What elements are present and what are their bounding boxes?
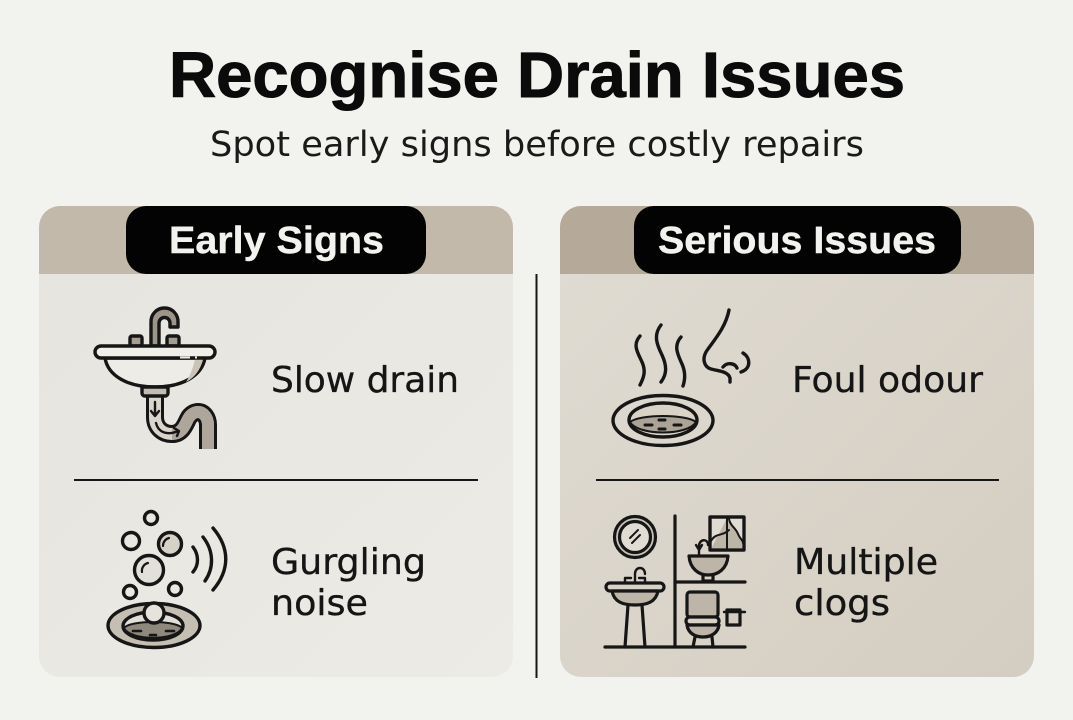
heading pill: early signs bbox=[126, 206, 426, 274]
label: foul odour: Foul odour bbox=[792, 360, 983, 401]
title: Recognise Drain Issues bbox=[169, 39, 905, 111]
subtitle: Spot early signs before costly repairs bbox=[210, 125, 864, 165]
heading pill: early signs: Early Signs bbox=[169, 220, 384, 262]
icon: bubbles and gurgling drain bbox=[108, 512, 226, 648]
label: multiple clogs bbox=[794, 542, 938, 624]
label: gurgling noise: Gurgling bbox=[271, 542, 426, 583]
label: gurgling noise bbox=[271, 542, 426, 624]
icon: bathroom with multiple fixtures bbox=[605, 516, 745, 647]
panel header band: serious issues bbox=[560, 206, 1034, 274]
panel: serious issues bbox=[560, 206, 1034, 677]
panel header band: early signs bbox=[39, 206, 513, 274]
heading pill: serious issues: Serious Issues bbox=[658, 220, 936, 262]
label: gurgling noise: noise bbox=[271, 583, 368, 624]
icon: foul odour from drain with nose bbox=[613, 310, 749, 446]
label: multiple clogs: Multiple bbox=[794, 542, 938, 583]
icon: sink with slow drain bbox=[95, 308, 215, 449]
heading pill: serious issues bbox=[634, 206, 961, 274]
centre divider bbox=[536, 274, 538, 678]
panel: early signs bbox=[39, 206, 513, 677]
label: multiple clogs: clogs bbox=[794, 583, 890, 624]
label: slow drain: Slow drain bbox=[271, 360, 459, 401]
